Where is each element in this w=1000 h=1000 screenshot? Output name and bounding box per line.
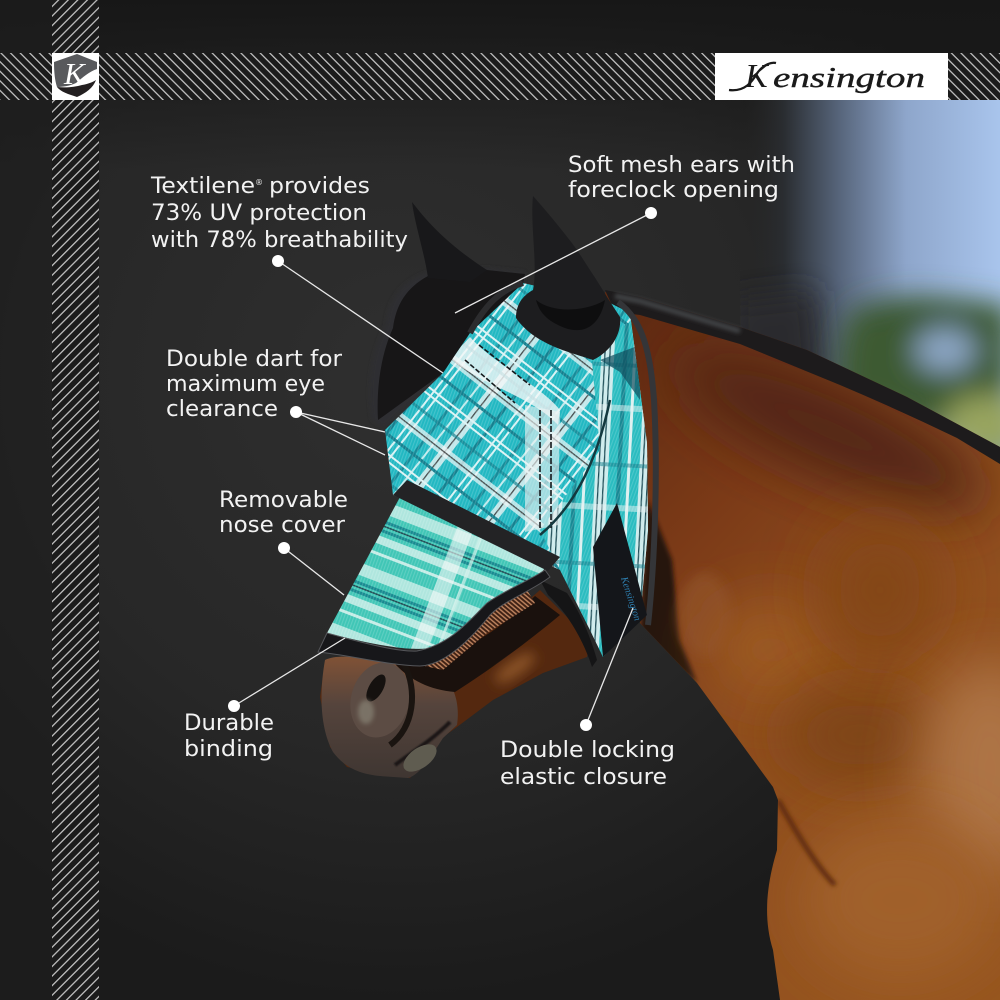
right ear with ruffled base <box>516 196 620 360</box>
nose cover lower binding <box>318 570 550 666</box>
callout: double locking elastic closure: Double locking <box>500 738 675 763</box>
jaw shadow under nose cover <box>395 596 560 692</box>
nostril <box>342 656 418 745</box>
callout: double dart: clearance <box>166 397 278 422</box>
blurred outdoor scenery: sky and foliage <box>750 100 1000 447</box>
callout: double dart: Double dart for <box>166 347 343 372</box>
callout: soft mesh ears <box>568 153 795 219</box>
callout: double dart <box>166 347 343 422</box>
callout: removable nose cover <box>219 488 348 554</box>
mouth and chin <box>395 722 450 777</box>
nose cover top strap <box>393 480 560 571</box>
top binding <box>470 283 523 333</box>
callout: Textilene: 73% UV protection <box>151 201 367 226</box>
cheek elastic strap <box>593 503 647 657</box>
callout: removable nose cover: nose cover <box>219 513 346 538</box>
callout: durable binding: Durable <box>184 711 274 736</box>
logo badge: K shield: K <box>63 56 87 91</box>
forelock <box>370 268 525 428</box>
horse neck and body <box>605 292 1000 1000</box>
leader lines <box>234 213 651 725</box>
logo: Kensington wordmark <box>715 53 948 100</box>
horizontal hatched band <box>0 53 1000 100</box>
logo: Kensington wordmark: ensington <box>773 62 925 94</box>
horse head and jaw <box>320 590 590 778</box>
muzzle <box>322 657 458 778</box>
callout: Textilene: provides <box>269 174 370 199</box>
logo: Kensington wordmark: K <box>744 58 770 95</box>
callout: double locking elastic closure <box>500 719 675 790</box>
left ear <box>412 202 487 282</box>
chin mesh strip <box>420 590 535 670</box>
callout: durable binding: binding <box>184 737 273 762</box>
jowl shadow <box>640 500 697 683</box>
callout: soft mesh ears: foreclock opening <box>568 178 779 203</box>
jaw highlight <box>491 648 539 688</box>
fly mask main plaid panels <box>380 280 660 670</box>
cheek panel <box>540 322 648 657</box>
removable nose cover <box>318 480 560 670</box>
callout: soft mesh ears: Soft mesh ears with <box>568 153 795 178</box>
mane along the crest <box>605 290 1000 464</box>
jaw binding <box>540 580 597 667</box>
callout: durable binding <box>184 700 274 762</box>
callout: double locking elastic closure: elastic closure <box>500 765 667 790</box>
callout: Textilene: Textilene <box>150 174 255 199</box>
callout: Textilene: with 78% breathability <box>151 228 408 253</box>
vertical hatched strip <box>52 0 99 1000</box>
cheek elastic strap: Kensington <box>618 575 643 622</box>
side binding <box>618 302 656 625</box>
logo badge: K shield <box>52 53 99 100</box>
callout: double dart: maximum eye <box>166 372 325 397</box>
callout: Textilene: ® <box>255 178 263 187</box>
callout: removable nose cover: Removable <box>219 488 348 513</box>
callout: Textilene <box>150 174 408 267</box>
